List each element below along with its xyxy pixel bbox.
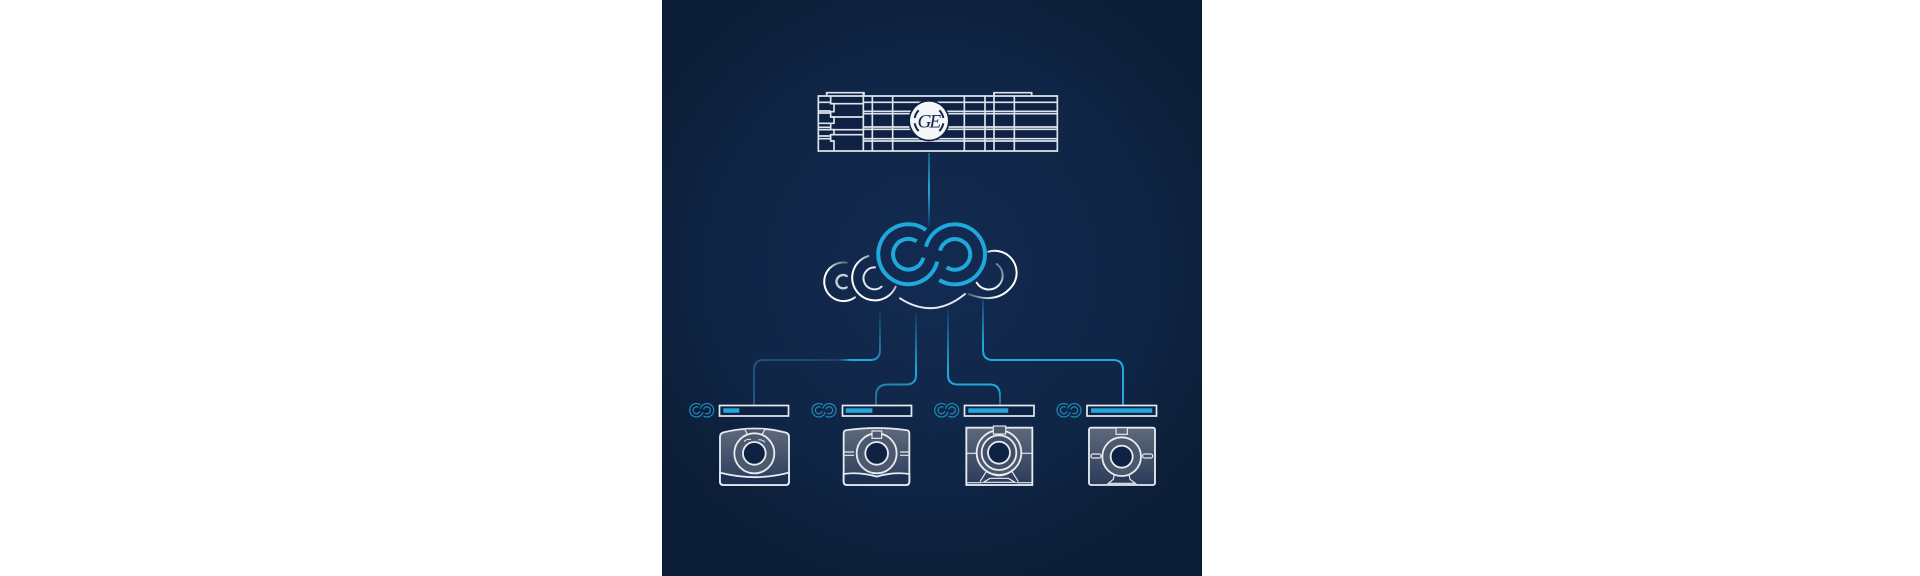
connector 4 [983,300,1123,405]
unit 4 [1057,403,1156,485]
link icon 2 [812,403,836,417]
connector: building to cloud [928,153,930,226]
unit 1 [690,403,789,485]
connector 1 [754,312,880,405]
link icon 4 [1057,403,1081,417]
cloud outlines: white arcs [824,251,1017,308]
connector 3 [948,308,1000,405]
link icon 3 [935,403,959,417]
cloud [824,224,1017,308]
progress bar 1 [720,406,788,416]
connector 2 [876,312,916,405]
link icon 1 [690,403,714,417]
cloud logo: blue infinity [878,224,985,284]
background panel [662,0,1202,576]
building columns [831,93,1014,151]
machine 3 [966,426,1032,485]
connector lines [754,300,1123,405]
unit 2 [812,403,912,485]
building floor lines [818,102,1057,141]
GE logo [908,100,950,141]
progress bar 4 [1087,406,1156,416]
GE building [818,93,1057,151]
progress bar 3 [964,406,1034,416]
machine 4 [1089,428,1155,485]
progress bar 2 [842,406,912,416]
unit 3 [935,403,1034,485]
machine 2 [844,428,909,485]
GE logo: GE [917,111,941,132]
building outline [818,93,1057,151]
machine 1 [720,428,789,485]
